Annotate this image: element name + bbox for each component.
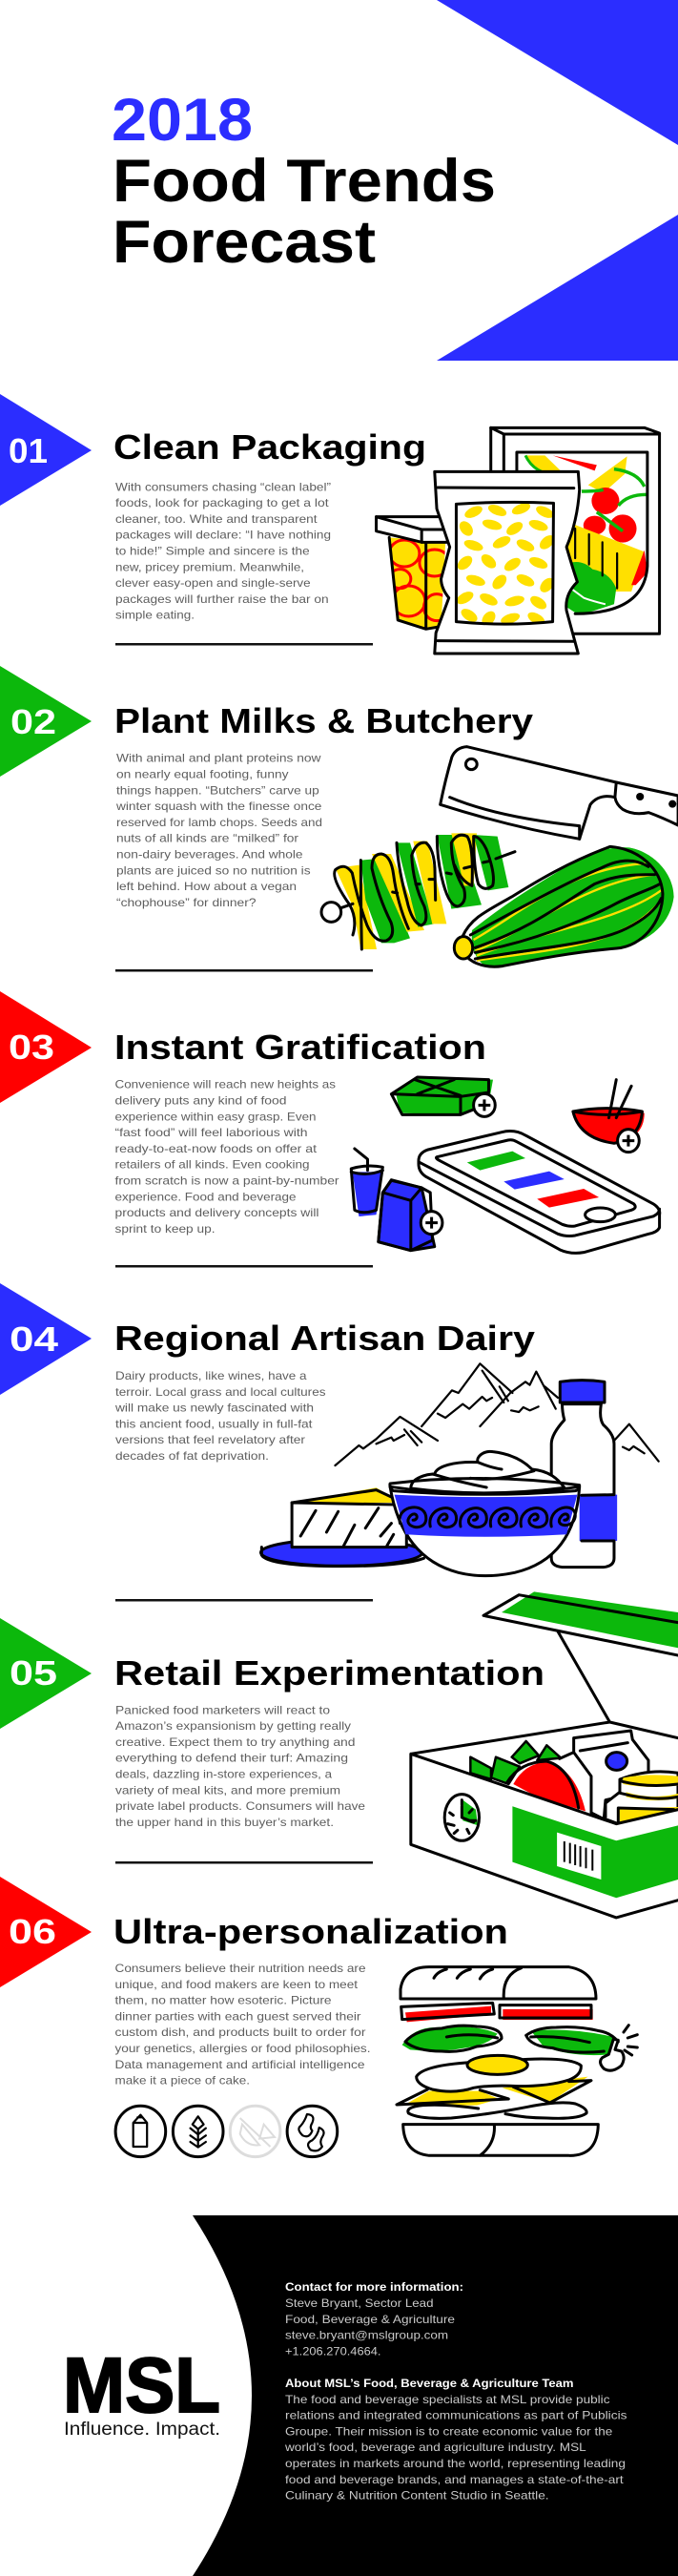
icon: wheat bbox=[173, 2106, 223, 2157]
body text 06 bbox=[114, 1962, 370, 2088]
number arrow 05: 05 bbox=[10, 1653, 57, 1693]
body text 03: delivery puts any kind of food bbox=[114, 1093, 286, 1107]
icon: phone bbox=[419, 1132, 660, 1253]
icon: yogurt bowl bbox=[390, 1451, 580, 1576]
icon: cleaver bbox=[441, 747, 678, 839]
icon: bottom bun bbox=[403, 2125, 598, 2155]
body text 01: simple eating. bbox=[115, 609, 195, 622]
number arrow 03: 03 bbox=[9, 1028, 54, 1067]
body text 02: nuts of all kinds are “milked” for bbox=[116, 832, 298, 845]
body text 05: the upper hand in this buyer’s market. bbox=[115, 1816, 334, 1829]
body text 03: sprint to keep up. bbox=[114, 1222, 216, 1236]
about the team: Groupe. Their mission is to create economic value for the bbox=[285, 2424, 613, 2438]
body text 02: non-dairy beverages. And whole bbox=[116, 847, 303, 861]
body text 04: decades of fat deprivation. bbox=[115, 1449, 269, 1463]
header triangles bbox=[437, 0, 678, 361]
panel: 06 ultra-personalization bbox=[0, 1877, 637, 2157]
body text 05: variety of meal kits, and more premium bbox=[115, 1783, 340, 1797]
body text 03: from scratch is now a paint-by-number bbox=[114, 1174, 339, 1187]
illustration: deconstructed sandwich bbox=[397, 1967, 637, 2155]
body text 05: Amazon’s expansionism by getting really bbox=[115, 1719, 351, 1733]
heading: Ultra-personalization: Ultra-personalization bbox=[113, 1912, 508, 1951]
body text 06: them, no matter how esoteric. Picture bbox=[114, 1994, 332, 2007]
logo: MSL: MSL bbox=[63, 2342, 220, 2429]
icon: top bun bbox=[401, 1967, 596, 1999]
body text 03: ready-to-eat-now foods on offer at bbox=[114, 1142, 318, 1155]
icon: tomato slices bbox=[401, 2003, 593, 2022]
icon: clock bbox=[444, 1795, 479, 1840]
icon: red bowl bbox=[573, 1080, 645, 1153]
icons: dietary restrictions bbox=[115, 2106, 338, 2157]
body text 01: With consumers chasing “clean label” bbox=[115, 480, 331, 493]
title: 2018 bbox=[112, 87, 253, 154]
icon: lettuce bbox=[402, 2025, 618, 2055]
about the team: Culinary & Nutrition Content Studio in Seattle. bbox=[285, 2489, 549, 2503]
number arrow 05 bbox=[0, 1618, 92, 1729]
body text 02: on nearly equal footing, funny bbox=[116, 767, 288, 780]
icon: hand cursor bbox=[601, 2025, 637, 2070]
icon: takeout box bbox=[391, 1077, 495, 1116]
body text 02 bbox=[115, 752, 322, 909]
body text 05: deals, dazzling in-store experiences, a bbox=[115, 1767, 332, 1780]
black curved background bbox=[193, 2215, 678, 2576]
panel: 05 retail experimentation bbox=[0, 1591, 678, 1918]
body text 06: your genetics, allergies or food philosophies. bbox=[114, 2042, 370, 2055]
number arrow 01 bbox=[0, 394, 92, 506]
body text 06: Data management and artificial intelligence bbox=[114, 2058, 365, 2071]
about the team: operates in markets around the world, representing leading bbox=[285, 2457, 626, 2470]
body text 01: to hide!” Simple and sincere is the bbox=[115, 544, 310, 557]
body text 06: dinner parties with each guest served their bbox=[114, 2009, 360, 2023]
icon: bottle bbox=[551, 1381, 617, 1568]
body text 04 bbox=[114, 1369, 326, 1463]
body text 02: With animal and plant proteins now bbox=[116, 752, 321, 765]
contact information: Contact for more information: bbox=[285, 2280, 463, 2294]
contact information: +1.206.270.4664. bbox=[285, 2344, 381, 2358]
number arrow 06: 06 bbox=[9, 1912, 56, 1951]
number arrow 06 bbox=[0, 1877, 92, 1987]
body text 01: clever easy-open and single-serve bbox=[115, 576, 311, 590]
body text 03: retailers of all kinds. Even cooking bbox=[114, 1158, 309, 1172]
heading: Plant Milks & Butchery: Plant Milks & Butchery bbox=[114, 701, 533, 740]
body text 03: experience within easy grasp. Even bbox=[114, 1110, 317, 1123]
number arrow 02 bbox=[0, 666, 92, 777]
about the team: About MSL’s Food, Beverage & Agriculture Team bbox=[285, 2377, 574, 2390]
about the team bbox=[284, 2377, 627, 2503]
heading: Instant Gratification: Instant Gratification bbox=[114, 1028, 486, 1067]
illustration: meal kit box bbox=[411, 1591, 678, 1918]
about the team: world’s food, beverage and agriculture industry. MSL bbox=[284, 2441, 586, 2454]
body text 06: unique, and food makers are keen to meet bbox=[114, 1978, 359, 1991]
body text 04: terroir. Local grass and local cultures bbox=[115, 1385, 326, 1399]
logo: MSL: Influence. Impact. bbox=[64, 2420, 220, 2440]
number arrow 04 bbox=[0, 1283, 92, 1395]
body text 02: winter squash with the finesse once bbox=[115, 800, 322, 813]
footer panel bbox=[63, 2215, 678, 2576]
number arrow 02: 02 bbox=[10, 702, 56, 741]
icon: paper bag bbox=[379, 1180, 442, 1251]
body text 02: reserved for lamb chops. Seeds and bbox=[116, 816, 322, 829]
body text 03: Convenience will reach new heights as bbox=[114, 1078, 336, 1091]
contact information: steve.bryant@mslgroup.com bbox=[285, 2329, 448, 2342]
contact information: Food, Beverage & Agriculture bbox=[285, 2313, 455, 2326]
body text 04: versions that feel revelatory after bbox=[115, 1433, 305, 1446]
body text 02: things happen. “Butchers” carve up bbox=[116, 783, 319, 797]
body text 03: experience. Food and beverage bbox=[114, 1190, 297, 1203]
title: Food Trends bbox=[113, 148, 496, 215]
illustration: delivery by phone bbox=[351, 1077, 660, 1253]
icon: box contents bbox=[470, 1731, 678, 1824]
body text 06: make it a piece of cake. bbox=[114, 2074, 250, 2088]
icon: squash bbox=[454, 846, 674, 967]
icon: box lid bbox=[483, 1591, 678, 1722]
body text 01: cleaner, too. White and transparent bbox=[115, 512, 318, 526]
title: Forecast bbox=[113, 209, 376, 276]
icon: mountains bbox=[335, 1363, 659, 1465]
icon: onion bbox=[408, 2103, 586, 2118]
about the team: The food and beverage specialists at MSL provide public bbox=[285, 2393, 610, 2406]
icon: citrus crossed out bbox=[230, 2106, 280, 2157]
icon: peanuts bbox=[287, 2106, 338, 2157]
body text 04: Dairy products, like wines, have a bbox=[115, 1369, 307, 1382]
body text 06: custom dish, and products built to order for bbox=[114, 2025, 366, 2039]
number arrow 04: 04 bbox=[10, 1319, 58, 1359]
body text 01: new, pricey premium. Meanwhile, bbox=[115, 560, 304, 573]
icon: milk carton bbox=[115, 2106, 166, 2157]
icon: front bag bbox=[435, 471, 580, 654]
body text 05: Panicked food marketers will react to bbox=[115, 1703, 330, 1716]
body text 02: left behind. How about a vegan bbox=[116, 880, 297, 893]
body text 03: products and delivery concepts will bbox=[114, 1206, 318, 1219]
panel: 02 plant milks and butchery bbox=[0, 666, 678, 971]
illustration: cleaver, skewer and squash bbox=[321, 747, 678, 967]
body text 01: packages will declare: “I have nothing bbox=[115, 529, 331, 542]
panel: 01 clean packaging bbox=[0, 394, 660, 654]
illustration: food packages bbox=[377, 427, 660, 654]
contact information bbox=[285, 2280, 463, 2358]
contact information: Steve Bryant, Sector Lead bbox=[285, 2296, 433, 2310]
panel: 04 regional artisan dairy bbox=[0, 1283, 659, 1601]
icon: cup bbox=[377, 517, 450, 629]
heading: Clean Packaging: Clean Packaging bbox=[113, 427, 426, 467]
number arrow 01: 01 bbox=[9, 431, 48, 470]
about the team: relations and integrated communications as part of Publicis bbox=[285, 2409, 627, 2422]
body text 05: everything to defend their turf: Amazing bbox=[115, 1752, 348, 1765]
icon: egg and cheese bbox=[397, 2055, 591, 2106]
icon: drink cup bbox=[351, 1149, 382, 1216]
number arrow 03 bbox=[0, 991, 92, 1103]
body text 02: “chophouse” for dinner? bbox=[116, 896, 257, 909]
heading: Retail Experimentation: Retail Experimentation bbox=[114, 1653, 544, 1693]
title bbox=[112, 87, 496, 276]
about the team: food and beverage brands, and manages a state-of-the-art bbox=[285, 2473, 624, 2486]
body text 05 bbox=[115, 1703, 365, 1829]
body text 03: “fast food” will feel laborious with bbox=[114, 1126, 307, 1139]
body text 03 bbox=[114, 1078, 339, 1236]
body text 04: will make us newly fascinated with bbox=[114, 1402, 314, 1415]
illustration: mountains, yogurt, cheese and bottle bbox=[260, 1363, 659, 1576]
body text 01: packages will further raise the bar on bbox=[115, 592, 329, 606]
body text 06: Consumers believe their nutrition needs are bbox=[114, 1962, 366, 1975]
body text 02: plants are juiced so no nutrition is bbox=[116, 863, 311, 877]
body text 04: this ancient food, usually in full-fat bbox=[115, 1417, 313, 1430]
heading: Regional Artisan Dairy: Regional Artisan Dairy bbox=[114, 1319, 535, 1358]
icon: box body bbox=[411, 1722, 678, 1918]
icon: cheese on plate bbox=[260, 1487, 423, 1567]
icon: back box bbox=[491, 427, 660, 634]
panel: 03 instant gratification bbox=[0, 991, 660, 1267]
icon: squash skewer bbox=[321, 833, 515, 949]
body text 01: foods, look for packaging to get a lot bbox=[115, 496, 329, 509]
body text 01 bbox=[115, 480, 331, 622]
body text 05: private label products. Consumers will have bbox=[115, 1799, 365, 1813]
body text 05: creative. Expect them to try anything and bbox=[115, 1735, 355, 1749]
